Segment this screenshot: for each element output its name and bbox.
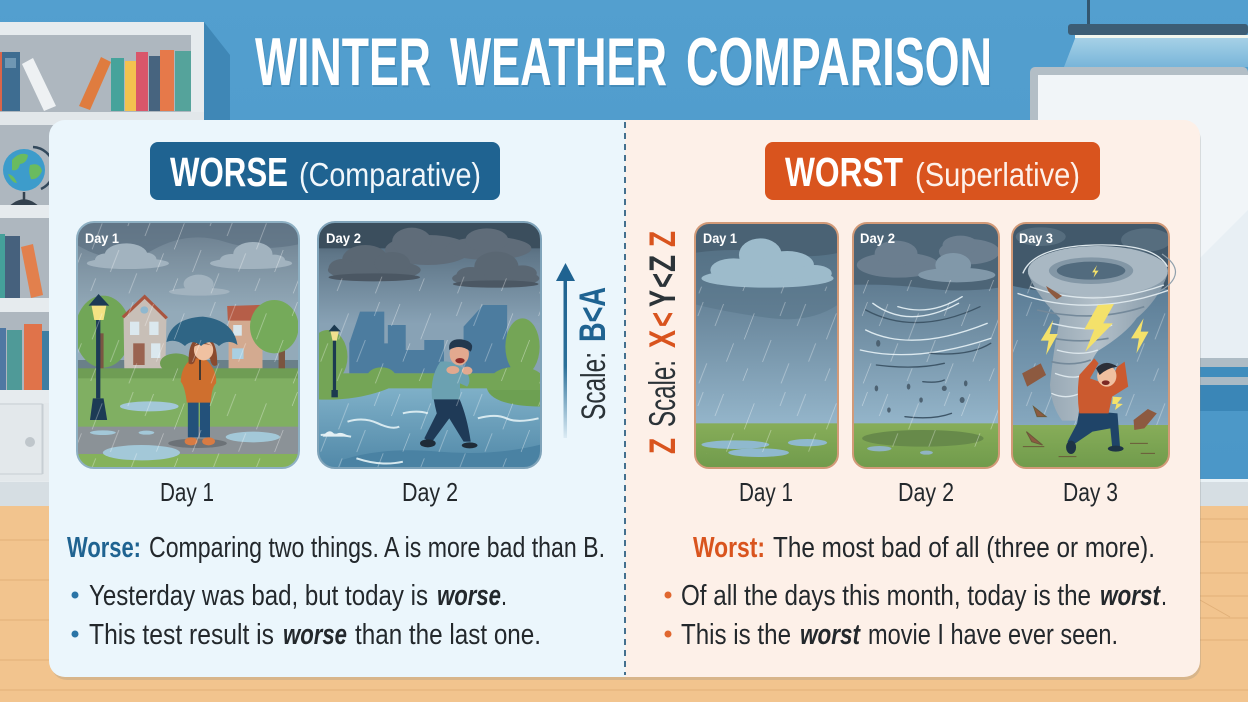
examples: worse: worse <box>283 619 347 651</box>
captions: day labels: Day 2 <box>898 477 954 507</box>
heading: worse comparative: (Comparative) <box>299 156 481 193</box>
title: WINTER <box>255 24 431 100</box>
cabinet <box>0 403 204 481</box>
illustration: worst day 3 tornado <box>1009 220 1178 470</box>
heading: worst superlative: WORST <box>785 149 903 195</box>
illustration: worst day 2 wind and rain <box>848 220 1005 470</box>
arrow: comparative scale <box>556 263 575 438</box>
dark clouds <box>385 228 531 265</box>
definition: worse: Worse: <box>67 532 141 564</box>
illustration: day 2 heavy rain and flood: Day 2 <box>326 231 361 246</box>
captions: day labels: Day 1 <box>739 477 793 507</box>
illustration: day 1 light rain: Day 1 <box>85 231 119 246</box>
examples: worst: worst <box>800 619 861 651</box>
baseboard <box>0 481 1248 506</box>
panicked person <box>1066 358 1128 454</box>
girl with umbrella <box>166 317 237 448</box>
examples: worst: worst <box>1100 580 1161 612</box>
examples: worst: This is the <box>681 619 791 651</box>
scale label: X less than Y less than Z: Z <box>642 255 683 272</box>
title <box>255 24 993 102</box>
main comparison card <box>49 120 1201 680</box>
illustration: worst day 2 wind and rain: Day 2 <box>860 231 895 246</box>
scale label: X less than Y less than Z: Z <box>642 438 683 454</box>
wind swirls <box>860 297 991 418</box>
clouds <box>857 236 1000 278</box>
scale label: X less than Y less than Z: Z <box>642 231 683 247</box>
heading: worst superlative: (Superlative) <box>915 156 1080 193</box>
cloud <box>701 238 834 288</box>
examples: worst: movie I have ever seen. <box>868 619 1118 651</box>
panel: worst <box>625 120 1200 677</box>
street lamp <box>329 325 341 397</box>
puddles <box>701 439 827 457</box>
definition: worst: The most bad of all (three or more). <box>773 532 1155 564</box>
definition: worse <box>67 532 605 564</box>
tornado funnel <box>1028 273 1168 421</box>
scale label: X less than Y less than Z <box>642 231 683 454</box>
heading: worst superlative <box>765 142 1100 200</box>
examples: worst: Of all the days this month, today is the <box>681 580 1091 612</box>
flood water <box>319 388 540 467</box>
flying debris <box>1022 286 1157 457</box>
title: COMPARISON <box>687 26 993 102</box>
illustration: worst day 1 rain: Day 1 <box>703 231 737 246</box>
definition: worst: Worst: <box>693 532 765 564</box>
bushes <box>308 318 546 400</box>
city skyline <box>349 305 521 373</box>
scale label: B less than A: B<A <box>572 287 613 342</box>
definition: worse: Comparing two things. A is more bad than B. <box>149 532 605 564</box>
captions: day labels: Day 1 <box>160 477 214 507</box>
street lamp <box>89 294 109 420</box>
scale label: X less than Y less than Z: X <box>642 330 683 348</box>
captions: day labels <box>160 477 1118 507</box>
illustration: day 1 light rain <box>74 220 303 471</box>
ceiling lamp <box>1064 0 1248 67</box>
examples: worse: This test result is <box>89 619 274 651</box>
scale label: X less than Y less than Z: < <box>642 312 683 327</box>
illustration: day 2 heavy rain and flood <box>308 220 546 473</box>
examples: worse <box>72 580 541 651</box>
heading: worse comparative <box>150 142 500 200</box>
title: WEATHER <box>450 24 667 100</box>
scale label: X less than Y less than Z: Scale: <box>642 360 683 427</box>
house <box>123 296 167 368</box>
illustration: worst day 1 rain <box>691 220 844 470</box>
whiteboard <box>1030 67 1248 411</box>
examples: worse: than the last one. <box>355 619 541 651</box>
icon: globe <box>3 147 54 204</box>
captions: day labels: Day 2 <box>402 477 458 507</box>
puddles <box>90 401 280 460</box>
scale label: X less than Y less than Z: Y <box>642 290 683 307</box>
distressed man <box>420 339 477 448</box>
clouds <box>87 242 292 296</box>
scale label: B less than A <box>572 287 613 420</box>
trees <box>78 296 126 368</box>
examples: worse: worse <box>437 580 501 612</box>
heading: worse comparative: WORSE <box>170 149 288 195</box>
captions: day labels: Day 3 <box>1063 477 1118 507</box>
scale label: X less than Y less than Z: < <box>642 273 683 288</box>
examples: worse: . <box>501 580 507 612</box>
books <box>0 50 191 390</box>
examples: worst: . <box>1161 580 1167 612</box>
examples: worst <box>664 580 1167 651</box>
floor <box>0 506 1248 702</box>
illustration: worst day 3 tornado: Day 3 <box>1019 231 1053 246</box>
title: WEATHER <box>451 26 668 102</box>
bookshelf <box>0 22 204 482</box>
scale label: B less than A: Scale: <box>575 352 613 420</box>
second house <box>227 304 262 368</box>
lightning bolts <box>1041 265 1149 355</box>
title: COMPARISON <box>686 24 992 100</box>
title: WINTER <box>256 26 432 102</box>
examples: worse: Yesterday was bad, but today is <box>89 580 428 612</box>
panel: worse <box>49 120 625 677</box>
